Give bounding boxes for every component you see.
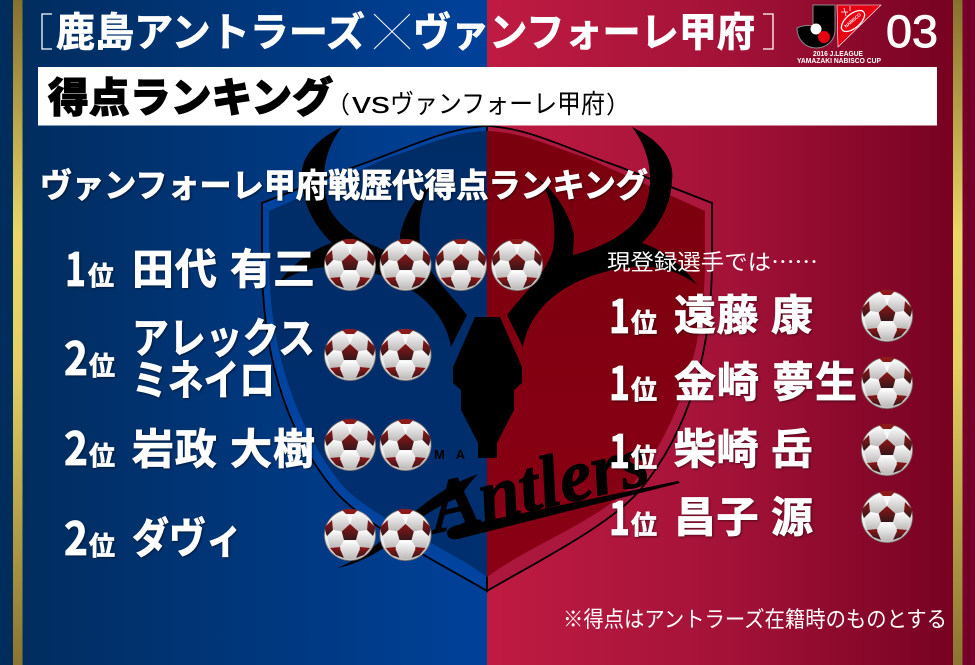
rank digit: 1 bbox=[609, 281, 630, 347]
rank unit: 位 bbox=[89, 346, 115, 383]
row: Endo bbox=[609, 281, 913, 347]
name: 柴崎 岳 bbox=[674, 426, 813, 473]
left ranking bbox=[64, 234, 543, 569]
rank digit: 2 bbox=[64, 503, 88, 569]
goal bbox=[861, 424, 913, 476]
rank unit: 位 bbox=[631, 303, 657, 340]
Nabisco pennant: NABISCO bbox=[843, 12, 862, 29]
rank digit: 1 bbox=[609, 483, 630, 549]
row: Kanazaki bbox=[609, 348, 913, 414]
script underline bbox=[447, 481, 680, 539]
subtitle note: close paren: ） bbox=[606, 85, 630, 120]
rank unit: 位 bbox=[631, 370, 657, 407]
title: Ventforet Kofu: ヴァンフォーレ甲府 bbox=[413, 11, 755, 55]
bar background bbox=[38, 67, 937, 126]
background: left navy half bbox=[0, 0, 487, 665]
row: Alex Mineiro bbox=[64, 315, 432, 404]
rank digit: 1 bbox=[609, 348, 630, 414]
goals bbox=[324, 509, 432, 561]
right ranking bbox=[607, 245, 913, 549]
goal bbox=[861, 357, 913, 409]
rank unit: 位 bbox=[89, 526, 115, 563]
J mark red ball bbox=[818, 31, 830, 43]
current squad heading: 現登録選手では…… bbox=[607, 245, 818, 277]
name: 金崎 夢生 bbox=[674, 359, 857, 406]
shield inner: right bbox=[487, 131, 705, 577]
rank unit: 位 bbox=[88, 256, 114, 293]
name: 遠藤 康 bbox=[674, 292, 813, 339]
goals bbox=[324, 419, 432, 471]
shield: right half bbox=[487, 126, 712, 591]
rank digit: 2 bbox=[64, 323, 88, 389]
row: Iwamasa bbox=[64, 413, 432, 479]
goal bbox=[861, 290, 913, 342]
antler: right bbox=[507, 127, 697, 347]
row: Shoji bbox=[609, 483, 913, 549]
left outer strip bbox=[0, 0, 13, 665]
goals bbox=[324, 329, 432, 381]
rank digit: 1 bbox=[65, 234, 86, 300]
title: Kashima Antlers: 鹿島アントラーズ bbox=[56, 11, 365, 55]
page number: 03 bbox=[886, 6, 938, 57]
left gold bar bbox=[13, 0, 22, 665]
script swash bbox=[337, 474, 478, 568]
title bbox=[42, 11, 773, 55]
name: 昌子 源 bbox=[674, 494, 813, 541]
right outer strip bbox=[962, 0, 975, 665]
name: 田代 有三 bbox=[132, 246, 315, 293]
shield: left half bbox=[262, 126, 487, 591]
subtitle note: opponent: ヴァンフォーレ甲府 bbox=[390, 89, 605, 119]
title bracket left bbox=[42, 14, 52, 49]
Antlers script: Antlers bbox=[417, 420, 656, 550]
right gold bar bbox=[953, 0, 962, 665]
J mark white ball bbox=[810, 24, 822, 34]
goal bbox=[861, 491, 913, 543]
row: Davi bbox=[64, 503, 432, 569]
subtitle note: open paren: （ bbox=[326, 85, 350, 120]
name line 1: アレックス bbox=[132, 315, 315, 362]
title bracket right bbox=[763, 14, 773, 49]
subtitle note: vs: vs bbox=[352, 85, 390, 120]
cross mark bbox=[374, 14, 410, 49]
subtitle bar bbox=[38, 67, 937, 126]
name: 岩政 大樹 bbox=[132, 426, 315, 473]
rank digit: 1 bbox=[609, 416, 630, 482]
J mark bbox=[797, 5, 835, 48]
skull bbox=[453, 317, 522, 458]
ranking heading: ヴァンフォーレ甲府戦歴代得点ランキング bbox=[40, 167, 648, 204]
goals bbox=[324, 239, 543, 291]
logo caption line 2: YAMAZAKI NABISCO CUP bbox=[797, 56, 881, 65]
rank unit: 位 bbox=[89, 436, 115, 473]
cup logo bbox=[797, 5, 881, 65]
rank unit: 位 bbox=[631, 505, 657, 542]
background: right crimson half bbox=[487, 0, 975, 665]
row: Shibasaki bbox=[609, 416, 913, 482]
rank digit: 2 bbox=[64, 413, 88, 479]
shield inner: left bbox=[269, 131, 487, 577]
footnote: ※得点はアントラーズ在籍時のものとする bbox=[563, 602, 947, 634]
Kashima Antlers crest watermark bbox=[262, 126, 712, 591]
row: Tashiro bbox=[65, 234, 543, 300]
name line 2: ミネイロ bbox=[132, 357, 275, 404]
antler: left bbox=[277, 127, 467, 347]
logo caption: 2016 J.LEAGUE bbox=[813, 49, 863, 58]
crest letters: M A bbox=[434, 447, 466, 462]
subtitle main: 得点ランキング bbox=[48, 75, 333, 121]
name: ダヴィ bbox=[132, 515, 243, 562]
rank unit: 位 bbox=[631, 438, 657, 475]
